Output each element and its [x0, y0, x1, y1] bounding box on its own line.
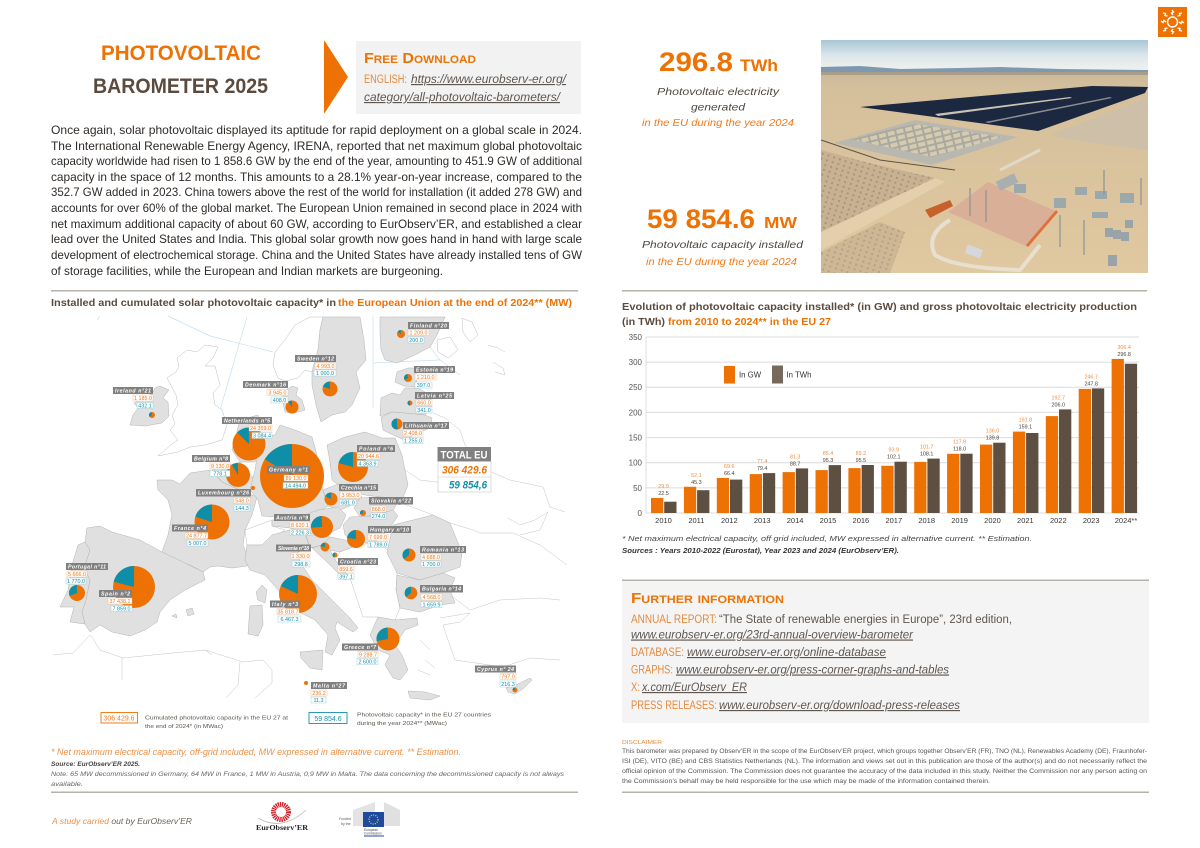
- label: Italy: Italy n°3: [272, 602, 298, 608]
- label: Latvia: [415, 392, 454, 414]
- bar chart: 159.1: [1019, 425, 1032, 431]
- label: Netherlands: 3 084.4: [253, 434, 271, 440]
- disclaimer: [622, 740, 1148, 785]
- arrow: [324, 40, 348, 114]
- label: Luxembourg: 144.3: [235, 506, 249, 512]
- bar chart: 81.3: [790, 454, 800, 460]
- bar chart: 300: [629, 358, 643, 367]
- bar chart: 296.8: [1117, 352, 1131, 358]
- Latvia pie: [408, 400, 412, 406]
- label: Hungary: Hungary n°10: [370, 528, 409, 534]
- label: Latvia: 660.0: [417, 400, 431, 406]
- label: France: 5 007.0: [188, 541, 206, 547]
- chart heading: from 2010 to 2024** in the EU 27: [668, 316, 831, 328]
- bar chart: 206.0: [1052, 402, 1065, 408]
- bar chart: 117.8: [953, 440, 966, 446]
- chart legend: In TWh: [786, 370, 812, 380]
- label: Spain: 37 438.1: [110, 599, 130, 605]
- Sweden pie: [322, 382, 338, 396]
- label: Slovakia: [369, 497, 413, 520]
- bar chart: 150: [629, 434, 643, 442]
- label: Denmark: 3 945.0: [268, 390, 286, 396]
- stat: electricity generated: in the EU during the year 2024: [642, 117, 794, 129]
- bar chart: 52.1: [691, 473, 702, 479]
- stat: electricity generated: TWh: [740, 57, 778, 75]
- label: Netherlands: Netherlands n°5: [224, 418, 270, 424]
- label: Lithuania: 2 408.0: [404, 431, 422, 437]
- stat: capacity installed: in the EU during the year 2024: [646, 256, 797, 268]
- map footnotes: [51, 747, 565, 788]
- map footnotes: Note: 65 MW decommissioned in Germany, 64 MW in France, 1 MW in Austria, 0,9 MW in Malta. The data concerning the decommissioned capacity is not always: [51, 771, 565, 778]
- label: Finland: Finland n°20: [410, 324, 447, 330]
- panel: free download: ENGLISH:: [364, 74, 407, 86]
- Portugal pie: [69, 585, 85, 601]
- label: France: France n°4: [174, 526, 206, 532]
- bar chart: 118.0: [953, 447, 966, 453]
- bar chart: 85.4: [823, 451, 833, 457]
- bar chart: 2019: [951, 516, 968, 525]
- label: Ireland: Ireland n°21: [115, 388, 151, 394]
- map of Europe: [53, 316, 567, 704]
- label: Spain: 7 859.0: [112, 606, 130, 612]
- bar chart: 2023: [1083, 516, 1100, 525]
- logo: EurObserv'ER: [256, 804, 309, 832]
- panel: free download: Free Download: [364, 50, 476, 67]
- title: [93, 42, 268, 98]
- bar chart: 29.9: [658, 484, 669, 490]
- Germany pie: [260, 444, 324, 508]
- bar chart: 2021: [1017, 516, 1034, 525]
- label: Slovenia: Slovenia n°18: [278, 546, 309, 552]
- label: Malta: [311, 682, 347, 704]
- label: Greece: 9 288.7: [359, 652, 377, 658]
- bar chart: 161.8: [1019, 418, 1032, 424]
- label: Germany: 89 130.0: [286, 476, 306, 482]
- intro text block: Once again, solar photovoltaic displayed its aptitude for rapid deployment on a global scale in 2024.: [51, 123, 582, 137]
- bar chart: 2013: [754, 516, 771, 525]
- panel: further information: ANNUAL REPORT:: [631, 614, 717, 626]
- bar chart: 95.5: [856, 458, 866, 464]
- Finland pie: [397, 330, 405, 338]
- intro text block: capacity worldwide had risen to 1 858.6 GW by the end of the year, amounting to 451.9 GW of additional: [51, 154, 582, 168]
- map legend: 59 854.6: [314, 716, 342, 723]
- label: Czechia: 681.0: [341, 500, 355, 506]
- label: Estonia: [414, 366, 455, 389]
- bar chart: 95.3: [823, 458, 833, 464]
- label: Spain: [99, 590, 132, 612]
- label: Germany: Germany n°1: [269, 468, 308, 474]
- label: Czechia: Czechia n°15: [341, 486, 376, 492]
- Slovakia pie: [360, 510, 366, 516]
- intro text block: The International Renewable Energy Agency, IRENA, reported that net maximum global photovoltaic: [51, 139, 582, 153]
- panel: further information: GRAPHS:: [631, 664, 673, 676]
- Bulgaria pie: [405, 587, 417, 599]
- label: Czechia: [339, 484, 378, 506]
- bar chart: 79.4: [757, 466, 767, 472]
- label: Poland: 20 944.6: [358, 454, 379, 460]
- label: Luxembourg: [196, 489, 251, 512]
- Ireland pie: [149, 412, 155, 418]
- title: PHOTOVOLTAIC: [101, 42, 261, 65]
- bar chart: 102.1: [887, 455, 901, 461]
- label: France: [172, 524, 208, 547]
- label: Portugal: 5 666.0: [68, 572, 86, 578]
- label: Ireland: [113, 387, 153, 410]
- label: Spain: Spain n°2: [101, 592, 130, 598]
- panel: further information: www.eurobserv-er.org/online-database: [687, 647, 886, 659]
- intro text block: lead over the United States and India. This global solar growth now goes hand in hand with large scale: [51, 232, 582, 246]
- bar chart: 136.0: [986, 429, 999, 435]
- label: Romania: [420, 546, 466, 568]
- label: Bulgaria: 4 568.0: [422, 595, 440, 601]
- Estonia pie: [404, 374, 412, 382]
- label: Poland: [357, 445, 395, 468]
- label: Germany: 14 494.0: [285, 484, 306, 490]
- France pie: [194, 504, 230, 540]
- Romania pie: [402, 548, 416, 562]
- intro text block: net maximum additional capacity of about 60 GW, according to EurObserv’ER, and established a clear: [51, 217, 582, 231]
- label: Slovenia: 1 330.0: [292, 554, 310, 560]
- map heading: [51, 297, 572, 309]
- label: Cyprus: Cyprus n° 24: [477, 667, 514, 673]
- bar chart: 45.3: [691, 480, 702, 486]
- label: Sweden: 4 993.0: [316, 364, 334, 370]
- label: Slovakia: 274.0: [372, 514, 385, 520]
- logo: funded by the European Commission: European: [364, 828, 378, 832]
- panel: further information: [622, 580, 1149, 723]
- map legend: during the year 2024** (MWac): [357, 721, 447, 727]
- intro text block: capacity in the space of 12 months. This amounts to a 28.1% year-on-year increase, compared to the: [51, 170, 582, 184]
- title: BAROMETER 2025: [93, 75, 268, 98]
- label: Austria: [274, 514, 310, 536]
- label: Croatia: Croatia n°23: [340, 560, 376, 566]
- map heading: the European Union at the end of 2024** (MW): [338, 297, 572, 309]
- label: Finland: 1 209.0: [410, 330, 428, 336]
- bar chart: 2022: [1050, 516, 1067, 525]
- bar chart: 350: [629, 333, 643, 342]
- bar chart: 2015: [820, 516, 836, 525]
- stat: electricity generated: generated: [691, 102, 746, 114]
- panel: further information: PRESS RELEASES:: [631, 700, 717, 712]
- panel: further information: DATABASE:: [631, 647, 684, 659]
- bar chart: 2016: [853, 516, 869, 525]
- bar chart: 2018: [918, 516, 935, 525]
- chart footnote: [622, 534, 1032, 555]
- panel: free download: https://www.eurobserv-er.org/: [411, 74, 568, 86]
- bar chart: 22.5: [658, 491, 669, 497]
- label: Austria: 8 620.1: [291, 523, 309, 529]
- label: Belgium: 9 130.0: [211, 464, 229, 470]
- label: Romania: 4 688.0: [422, 555, 440, 561]
- chart heading: (in TWh): [622, 316, 665, 328]
- Czechia pie: [324, 492, 338, 506]
- label: Netherlands: 24 359.0: [250, 426, 271, 432]
- label: Belgium: [192, 455, 230, 478]
- chart legend: [724, 366, 812, 384]
- bar chart: 69.6: [724, 464, 735, 470]
- logo: EurObserv'ER: EurObserv’ER: [256, 823, 309, 832]
- map legend: the end of 2024* (in MWac): [145, 724, 223, 730]
- study credit: A study carried out by EurObserv’ER: [51, 816, 192, 826]
- bar chart: 2011: [688, 516, 704, 525]
- bar chart: 88.7: [790, 461, 800, 467]
- label: Germany: [267, 466, 310, 490]
- label: Croatia: 397.1: [339, 574, 353, 580]
- chart heading: [622, 301, 1137, 328]
- label: Portugal: 1 770.0: [67, 579, 85, 585]
- Belgium pie: [226, 463, 250, 487]
- disclaimer: DISCLAIMER: [622, 740, 662, 746]
- logo: sun icon: [1158, 7, 1187, 37]
- label: Hungary: [368, 526, 411, 548]
- logo: funded by the European Commission: Funded: [339, 817, 351, 821]
- bar chart: 2014: [787, 516, 803, 525]
- chart footnote: Sources : Years 2010-2022 (Eurostat), Year 2023 and 2024 (EurObserv’ER).: [622, 546, 899, 555]
- bar chart: 0: [638, 509, 643, 518]
- bar chart: 2010: [655, 516, 672, 525]
- bar chart: 250: [629, 383, 643, 392]
- stat: electricity generated: [642, 47, 794, 129]
- bar chart: 108.1: [920, 452, 933, 458]
- label: Finland: 200.0: [409, 338, 423, 344]
- map footnotes: Source: EurObserv’ER 2025.: [51, 761, 140, 768]
- Cyprus pie: [512, 688, 518, 692]
- Croatia pie: [332, 552, 338, 558]
- disclaimer: This barometer was prepared by Observ’ER in the scope of the EurObserv’ER project, which groups together Observ’ER (FR), TNO (NL), Renewables Academy (DE), Fraunhofer-: [622, 748, 1147, 755]
- label: Croatia: [338, 558, 378, 580]
- Spain pie: [113, 566, 155, 608]
- bar chart: 93.9: [889, 448, 899, 454]
- bar chart: 246.7: [1084, 374, 1098, 380]
- bar chart: 77.4: [757, 459, 767, 465]
- logo: funded by the European Commission: [339, 802, 400, 836]
- label: Latvia: Latvia n°25: [417, 394, 452, 400]
- map heading: Installed and cumulated solar photovoltaic capacity* in: [51, 297, 336, 309]
- label: Austria: 2 226.3: [291, 530, 309, 536]
- disclaimer: the Commission’s behalf may be held responsible for the use which may be made of the information contained therein.: [622, 778, 990, 785]
- total EU callout: 306 429.6: [442, 464, 488, 476]
- label: France: 24 877.7: [186, 534, 207, 540]
- label: Bulgaria: Bulgaria n°14: [422, 586, 461, 592]
- total EU callout: [438, 447, 491, 492]
- logo: funded by the European Commission: by the: [341, 822, 351, 826]
- panel: free download: [356, 41, 581, 114]
- label: Italy: 35 818.7: [278, 610, 298, 616]
- bar chart: 66.4: [724, 471, 735, 477]
- Greece pie: [376, 628, 400, 650]
- panel: further information: “The State of renewable energies in Europe”, 23rd edition,: [719, 614, 1012, 626]
- disclaimer: ISI (DE), VITO (BE) and CBS Statistics Netherlands (NL). The information and views set out in this publication are those of the author(s) and do not necessarily reflect the: [622, 758, 1148, 765]
- bar chart: 2024**: [1115, 516, 1137, 525]
- bar chart: 100: [629, 459, 643, 468]
- label: Malta: Malta n°27: [313, 684, 346, 690]
- panel: free download: category/all-photovoltaic-barometers/: [364, 92, 562, 104]
- label: Slovakia: Slovakia n°22: [371, 498, 411, 504]
- map legend: Cumulated photovoltaic capacity in the EU 27 at: [145, 716, 288, 722]
- chart legend: In GW: [739, 370, 762, 380]
- label: Estonia: 397.0: [417, 383, 430, 389]
- panel: further information: x.com/EurObserv_ER: [641, 682, 747, 694]
- disclaimer: official opinion of the Commission. The Commission does not guarantee the accuracy of the data included in this study. Neither the Commission nor any person acting on: [622, 768, 1148, 775]
- bar chart: 2012: [721, 516, 738, 525]
- stat: electricity generated: 296.8: [659, 47, 733, 77]
- label: Hungary: 7 699.0: [369, 535, 387, 541]
- Lithuania pie: [392, 418, 402, 430]
- stat: capacity installed: 59 854.6: [647, 204, 755, 234]
- bar chart: 192.7: [1052, 395, 1065, 401]
- bar chart: 89.2: [856, 451, 866, 457]
- label: Italy: 6 467.3: [280, 617, 298, 623]
- label: Malta: 236.2: [312, 691, 326, 697]
- bar chart: 139.8: [986, 436, 999, 442]
- Luxembourg pie: [251, 486, 255, 490]
- label: Bulgaria: [420, 585, 463, 608]
- label: Hungary: 1 789.0: [369, 542, 387, 548]
- label: Austria: Austria n°9: [275, 516, 308, 522]
- bar chart: 2017: [885, 516, 902, 525]
- photo: solar plant with battery storage: [821, 40, 1148, 273]
- bar chart: 2020: [984, 516, 1001, 525]
- Denmark pie: [286, 400, 298, 414]
- intro text block: accounts for over 60% of the global market. The European Union remained in second place in 2024 with: [51, 201, 582, 215]
- stat: capacity installed: Photovoltaic capacity installed: [642, 239, 804, 251]
- panel: further information: Further information: [631, 590, 784, 607]
- label: Poland: 4 363.9: [358, 462, 376, 468]
- intro text block: [51, 123, 583, 278]
- bar chart: 101.7: [920, 445, 933, 451]
- Slovenia pie: [320, 542, 330, 552]
- label: Denmark: [243, 381, 288, 404]
- label: Czechia: 3 953.0: [342, 493, 360, 499]
- panel: further information: www.eurobserv-er.org/download-press-releases: [719, 700, 960, 712]
- label: Cyprus: [475, 666, 516, 688]
- label: Denmark: Denmark n°16: [245, 382, 286, 388]
- total EU callout: TOTAL EU: [440, 450, 488, 462]
- label: Poland: Poland n°6: [359, 446, 393, 452]
- label: Greece: 2 600.0: [358, 660, 376, 666]
- label: Luxembourg: Luxembourg n°26: [198, 490, 249, 496]
- label: Luxembourg: 548.0: [235, 498, 249, 504]
- stat: capacity installed: [642, 204, 804, 268]
- panel: further information: X:: [631, 682, 640, 694]
- map footnotes: * Net maximum electrical capacity, off-grid included, MW expressed in alternative current. ** Estimation.: [51, 747, 461, 757]
- label: Portugal: [66, 563, 108, 585]
- bar chart: 306.4: [1117, 345, 1131, 351]
- label: Slovakia: 868.0: [372, 507, 385, 513]
- map legend: [101, 712, 491, 730]
- label: Denmark: 408.0: [273, 398, 286, 404]
- bar chart: 200: [629, 408, 643, 418]
- label: Ireland: 432.1: [138, 404, 152, 410]
- bar chart: 247.8: [1084, 381, 1098, 387]
- label: Slovenia: 298.8: [294, 562, 308, 568]
- label: Bulgaria: 1 659.9: [422, 602, 440, 608]
- label: Lithuania: 1 255.0: [404, 438, 422, 444]
- label: Lithuania: [403, 422, 449, 444]
- map legend: Photovoltaic capacity* in the EU 27 countries: [357, 712, 491, 718]
- stat: capacity installed: MW: [764, 215, 797, 232]
- total EU callout: 59 854,6: [449, 480, 488, 492]
- label: Estonia: Estonia n°19: [416, 368, 453, 374]
- chart heading: Evolution of photovoltaic capacity installed* (in GW) and gross photovoltaic electricity production: [622, 301, 1137, 313]
- Italy pie: [279, 575, 317, 613]
- logo: funded by the European Commission: Commission: [364, 832, 382, 836]
- map footnotes: available.: [51, 781, 83, 788]
- intro text block: 352.7 GW added in 2023. China towers above the rest of the world for installation (it added 278 GW) and: [51, 185, 582, 199]
- panel: further information: www.eurobserv-er.org/press-corner-graphs-and-tables: [676, 664, 949, 676]
- label: Belgium: Belgium n°8: [194, 456, 228, 462]
- Austria pie: [311, 516, 333, 538]
- panel: further information: www.eurobserv-er.org/23rd-annual-overview-barometer: [631, 630, 914, 642]
- label: Netherlands: [222, 417, 272, 440]
- label: Slovenia: [276, 544, 311, 568]
- label: Latvia: 341.0: [417, 408, 431, 414]
- bar chart: [629, 333, 1139, 525]
- label: Malta: 11.3: [313, 698, 324, 704]
- label: Belgium: 778.1: [213, 472, 227, 478]
- label: Estonia: 1 210.0: [416, 375, 434, 381]
- Poland pie: [338, 452, 368, 482]
- label: Cyprus: 216.3: [501, 682, 515, 688]
- label: Lithuania: Lithuania n°17: [405, 424, 448, 430]
- label: Romania: 1 700.0: [422, 562, 440, 568]
- label: Sweden: [295, 355, 336, 377]
- intro text block: development of electrochemical storage. China and the United States have already installed tens of GW: [51, 248, 583, 262]
- Malta pie: [304, 681, 308, 685]
- label: Cyprus: 797.0: [501, 674, 515, 680]
- intro text block: of storage facilities, while the European and Indian markets are burgeoning.: [51, 264, 443, 278]
- label: Greece: Greece n°7: [344, 645, 377, 651]
- label: Portugal: Portugal n°11: [68, 564, 106, 570]
- label: Sweden: 1 000.0: [316, 371, 334, 377]
- Netherlands pie: [232, 428, 266, 460]
- bar chart: 50: [633, 484, 643, 493]
- label: Greece: [342, 644, 378, 666]
- label: Croatia: 859.6: [339, 567, 353, 573]
- label: Italy: [270, 600, 301, 623]
- stat: electricity generated: Photovoltaic electricity: [657, 86, 780, 98]
- label: Sweden: Sweden n°12: [297, 356, 334, 362]
- label: Romania: Romania n°13: [422, 548, 464, 554]
- label: Finland: [408, 322, 449, 344]
- chart footnote: * Net maximum electrical capacity, off grid included, MW expressed in alternative current. ** Estimation.: [622, 534, 1032, 543]
- Hungary pie: [347, 530, 365, 548]
- label: Ireland: 1 185.0: [134, 396, 152, 402]
- map legend: 306 429.6: [103, 716, 135, 722]
